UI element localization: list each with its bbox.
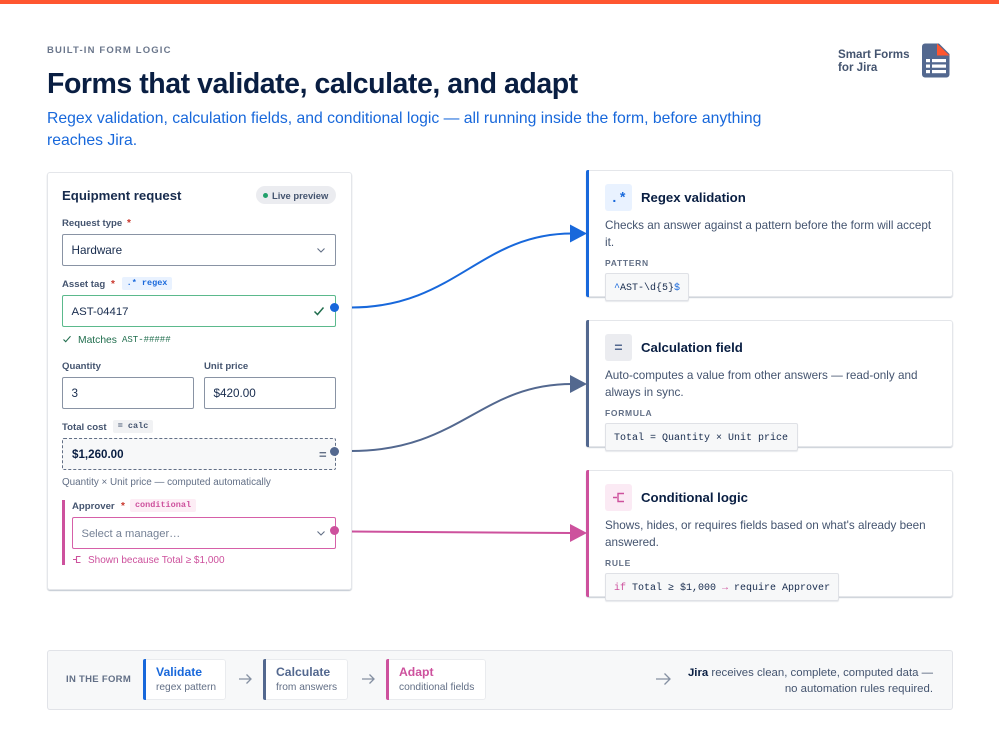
code sample: Total = Quantity × Unit price [614, 433, 788, 444]
card description: answered. [605, 536, 659, 549]
field label: PATTERN [605, 258, 649, 268]
brand name: Smart Forms [838, 48, 910, 61]
helper text: Quantity × Unit price — computed automatically [62, 477, 271, 488]
icon: equals [605, 334, 632, 361]
step title: Adapt [399, 665, 434, 679]
validation message [63, 335, 171, 346]
badge: conditional [130, 499, 196, 512]
icon: regex [605, 184, 632, 211]
step: adapt [386, 659, 486, 700]
step title: Calculate [276, 665, 330, 679]
card description [605, 219, 932, 249]
icon: equals: = [614, 341, 623, 357]
badge: regex [122, 277, 172, 290]
required marker: * [121, 501, 125, 512]
code sample [605, 573, 839, 601]
pill label: Live preview [272, 190, 328, 201]
connector arrows [352, 224, 586, 542]
connector dot: calc [330, 446, 338, 456]
Jira outcome text: no automation rules required. [785, 682, 933, 694]
field: asset tag input [62, 295, 336, 327]
label: request type: Request type [62, 218, 122, 229]
card: regex validation [586, 170, 953, 297]
arrow [239, 674, 252, 684]
Jira outcome text: Jira receives clean, complete, computed data — [688, 666, 933, 678]
strip label: IN THE FORM [66, 674, 131, 685]
top accent bar [0, 0, 999, 4]
field: quantity [62, 377, 194, 409]
subtitle: Regex validation, calculation fields, and conditional logic — all running inside the form, before anything reaches Jira. [47, 110, 761, 149]
field: approver select [72, 517, 336, 549]
card: conditional logic [586, 470, 953, 597]
brand: Smart Forms for Jira [838, 44, 950, 78]
code sample: ^AST-\d{5}$ [614, 283, 680, 294]
Jira outcome text [688, 666, 934, 694]
field: unit price [204, 377, 336, 409]
arrow [362, 674, 375, 684]
step: calculate [263, 659, 348, 700]
card: calculation field [586, 320, 953, 447]
panel: equipment request form [47, 172, 352, 590]
title: Forms that validate, calculate, and adapt [47, 68, 578, 100]
card description [605, 369, 917, 399]
connector dot: regex [330, 303, 338, 312]
step accent [143, 659, 146, 700]
badge: conditional: conditional [135, 500, 191, 510]
card description: always in sync. [605, 386, 684, 399]
field value: $420.00 [214, 387, 256, 400]
step accent [386, 659, 388, 700]
step accent [263, 659, 266, 700]
step detail: from answers [276, 682, 337, 693]
status dot [263, 192, 268, 198]
card description: Checks an answer against a pattern before the form will accept [605, 219, 931, 232]
field: total cost computed [62, 438, 336, 470]
pattern text: AST-##### [122, 335, 171, 345]
connector dot: conditional [330, 526, 338, 534]
eyebrow label: BUILT-IN FORM LOGIC [47, 45, 172, 56]
code sample [605, 423, 798, 451]
panel: form summary strip [47, 650, 953, 710]
label: total cost: Total cost [62, 422, 107, 433]
card description: Auto-computes a value from other answers — read-only and [605, 369, 917, 382]
message text: Matches [78, 335, 117, 346]
card accent [586, 470, 588, 597]
conditional bar [62, 500, 64, 565]
field: request type select [62, 234, 336, 266]
icon: check [314, 307, 324, 316]
icon: form document [922, 44, 950, 78]
arrow: total to calculation field [351, 375, 587, 451]
code sample [605, 273, 689, 301]
icon: check [63, 336, 71, 342]
condition message: Shown because Total ≥ $1,000 [88, 555, 225, 566]
required marker: * [127, 218, 131, 229]
icon: equals: = [319, 447, 327, 462]
label: asset tag: Asset tag [62, 279, 105, 290]
computed value: $1,260.00 [72, 448, 124, 461]
badge: calc: = calc [118, 421, 148, 431]
icon: chevron [317, 531, 325, 536]
icon: regex: .* [610, 191, 627, 207]
card description: Shows, hides, or requires fields based on what's already been [605, 519, 926, 532]
card title: Conditional logic [641, 490, 748, 505]
arrow: regex to regex validation [351, 224, 587, 308]
field value: 3 [72, 387, 78, 400]
step: validate [143, 659, 226, 700]
card title: Regex validation [641, 190, 746, 205]
brand name [838, 48, 910, 74]
card accent [586, 170, 588, 297]
card description [605, 519, 926, 549]
placeholder: Select a manager… [82, 528, 180, 540]
form heading: Equipment request [62, 188, 181, 203]
icon: branch [605, 484, 632, 511]
live preview pill [256, 186, 336, 204]
step title: Validate [156, 665, 202, 679]
card description: it. [605, 236, 614, 249]
field label: FORMULA [605, 408, 652, 418]
arrow to Jira [656, 673, 671, 685]
required marker: * [111, 279, 115, 290]
step detail: conditional fields [399, 682, 474, 693]
label: quantity: Quantity [62, 361, 101, 372]
code sample: if Total ≥ $1,000 → require Approver [614, 583, 830, 594]
card title: Calculation field [641, 340, 743, 355]
step detail: regex pattern [156, 682, 216, 693]
field value: AST-04417 [72, 306, 128, 318]
field label: RULE [605, 558, 631, 568]
field value: Hardware [72, 244, 122, 257]
label: approver: Approver [72, 501, 115, 512]
label: unit price: Unit price [204, 361, 248, 372]
arrow: approver to conditional logic [351, 524, 587, 542]
icon: branch [73, 556, 80, 563]
icon: chevron [317, 248, 325, 253]
badge: calc [113, 420, 153, 433]
conditional section [62, 499, 336, 566]
badge: regex: .* regex [127, 278, 167, 288]
brand name: for Jira [838, 61, 877, 74]
card accent [586, 320, 588, 447]
